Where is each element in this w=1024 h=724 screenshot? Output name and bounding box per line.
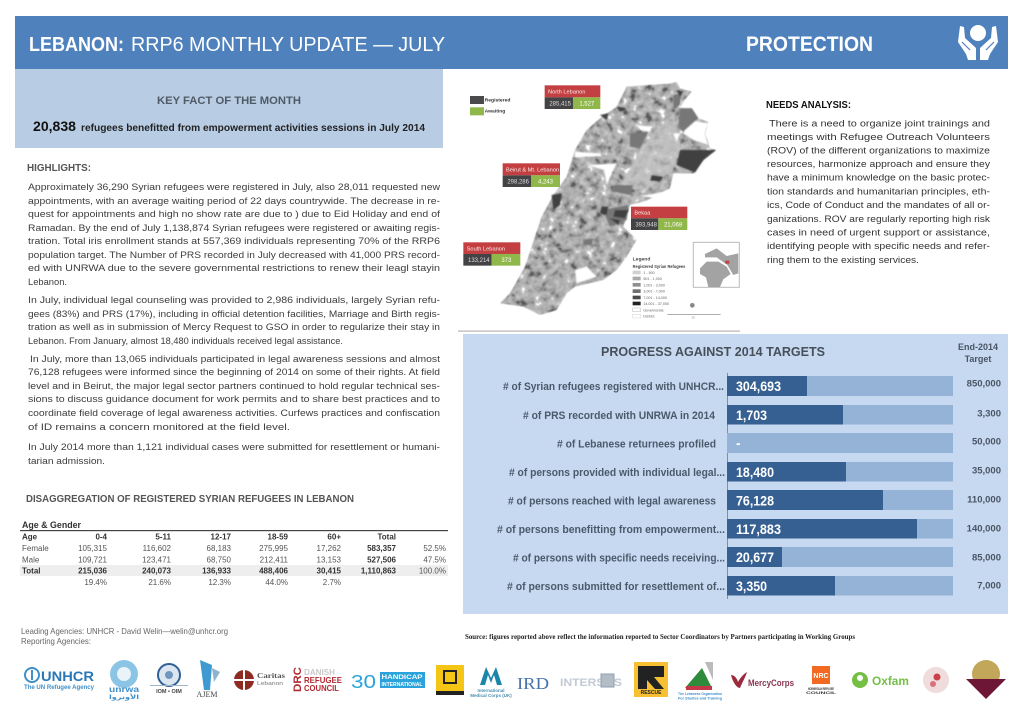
panel: key fact of the month	[15, 69, 443, 148]
bar: resettlement: 7,000	[977, 580, 1001, 592]
logo: Lebanese Organization for Studies and Training	[678, 662, 723, 700]
logo: Lebanese Organization for Studies and Training: The Lebanese Organization	[678, 691, 722, 696]
table: age and gender: 123,471	[142, 556, 172, 564]
logo: Handicap International: INTERNATIONAL	[382, 682, 422, 688]
bar: PRS recorded: 1,703	[736, 408, 767, 423]
text block: highlights: Lebanon.	[28, 277, 67, 288]
partner logos	[24, 660, 1006, 701]
text block: highlights: Approximately 36,290 Syrian refugees were registered in July, also 28,011 requested new	[28, 182, 440, 193]
map legend: 7,001 - 14,000	[643, 296, 667, 300]
bar: Syrian refugees registered: # of Syrian refugees registered with UNHCR...	[503, 381, 724, 393]
table: age and gender: 68,183	[207, 544, 232, 553]
text block: highlights: In July, individual legal counseling was provided to 2,986 individuals, largely Syrian refu-	[28, 295, 440, 306]
table: age and gender: Age & Gender	[22, 520, 81, 530]
bar: Syrian refugees registered	[503, 376, 1001, 396]
text block: highlights: quest for appointments and high no show rate are due to ) due to Eid Holiday and end of	[28, 209, 440, 220]
text block: highlights: gees (83%) and PRS (17%), including in official detention facilities, Marriage and Birth regis-	[28, 309, 440, 320]
text block: highlights: appointments, with an average waiting period of 22 days countrywide. The decrease in re-	[28, 196, 440, 207]
callout: South Lebanon	[463, 242, 520, 266]
logo: UNRWA: الأونروا	[109, 693, 139, 701]
key fact statement: 20,838	[33, 119, 77, 134]
map legend: 501 - 1,000	[643, 277, 662, 281]
needs analysis text: tion standards and humanitarian principles, eth-	[767, 186, 990, 198]
needs analysis heading: NEEDS ANALYSIS:	[766, 100, 851, 111]
target column heading: End-2014	[958, 342, 998, 352]
logo: red circle partner	[923, 667, 949, 693]
bar: PRS recorded	[523, 405, 1001, 424]
needs analysis text: ics, Code of Conduct and the mandates of all or-	[767, 200, 990, 211]
panel: progress against 2014 targets	[463, 334, 1008, 614]
text block: highlights: of ID remains a concern monitored at the field level.	[28, 422, 290, 433]
needs analysis text: cases in need of urgent support or assistance,	[767, 228, 990, 238]
title: LEBANON:	[29, 34, 124, 56]
disaggregation heading: DISAGGREGATION OF REGISTERED SYRIAN REFUGEES IN LEBANON	[26, 493, 354, 505]
bar: empowerment: 140,000	[967, 524, 1001, 534]
bar: resettlement	[507, 576, 1001, 596]
table: age and gender: 44.0%	[265, 578, 288, 587]
table: age and gender: Age	[22, 532, 38, 542]
map of Lebanon	[463, 82, 739, 320]
map legend: Registered Syrian Refugees	[633, 264, 686, 269]
legend swatch: registered: Registered	[485, 98, 510, 104]
needs analysis text: ring them to the existing services.	[767, 255, 919, 266]
logo: NRC: NRC	[813, 673, 829, 680]
table: age and gender: 116,602	[143, 544, 172, 553]
bar: Lebanese returnees: # of Lebanese returnees profiled	[557, 438, 716, 450]
bar: empowerment: # of persons benefitting from empowerment...	[497, 524, 725, 536]
table: age and gender: 136,933	[202, 566, 232, 576]
table: age and gender: 13,153	[317, 556, 342, 564]
logo: International Medical Corps: Medical Corps (UK)	[470, 693, 512, 698]
logo: Danish Refugee Council: COUNCIL	[304, 683, 339, 693]
table: age and gender: Total	[22, 566, 41, 576]
logo: AJEM: AJEM	[197, 690, 217, 699]
bar: Lebanese returnees: -	[736, 436, 740, 451]
bar: legal awareness: 110,000	[967, 494, 1001, 506]
table: age and gender: 2.7%	[323, 578, 341, 587]
callout: Bekaa: 393,948	[635, 222, 658, 228]
table: age and gender: 105,315	[78, 544, 108, 553]
logo: Handicap International: 30	[351, 672, 376, 692]
callout: North Lebanon: North Lebanon	[548, 89, 585, 95]
scale bar and north arrow	[667, 303, 721, 320]
logo: Handicap International: HANDICAP	[382, 674, 423, 681]
bar: resettlement: # of persons submitted for resettlement of...	[507, 581, 725, 593]
table: age and gender: 5-11	[155, 532, 172, 542]
table: age and gender: 68,750	[207, 556, 232, 564]
logo: NRC	[806, 666, 838, 695]
map legend: Legend	[633, 257, 650, 263]
text block: highlights: level and in Beirut, the major legal sector partners continued to hold regular technical ses-	[28, 381, 440, 392]
logo: Danish Refugee Council	[292, 667, 342, 693]
logo: UNRWA: unrwa	[109, 685, 140, 694]
logo: Danish Refugee Council: DANISH	[304, 667, 335, 677]
target column heading: Target	[965, 354, 991, 364]
table: age and gender: 1,110,863	[361, 566, 397, 576]
table: age and gender: 21.6%	[148, 578, 171, 587]
bar: individual legal counseling: # of persons provided with individual legal...	[509, 467, 725, 479]
logo: yellow partner	[436, 665, 464, 695]
bar: legal awareness: 76,128	[736, 494, 774, 508]
map legend	[633, 257, 686, 319]
logo: IRC Rescue: RESCUE	[641, 690, 662, 696]
bar: PRS recorded: 3,300	[977, 408, 1001, 420]
logo: Oxfam: Oxfam	[872, 674, 909, 688]
callout: Beirut and Mt. Lebanon: Beirut & Mt. Lebanon	[506, 167, 559, 173]
logo: Mercy Corps	[731, 672, 794, 689]
table: age and gender: 240,073	[142, 566, 172, 576]
text block: highlights: tarian admission.	[28, 456, 105, 467]
table: age and gender: 52.5%	[423, 544, 446, 553]
table: age and gender: 18-59	[268, 532, 289, 542]
callout: North Lebanon: 285,415	[549, 101, 572, 107]
logo: IOM: IOM • OIM	[156, 689, 182, 695]
callout: Beirut and Mt. Lebanon: 4,243	[538, 179, 554, 185]
table: age and gender: 109,721	[78, 556, 108, 564]
needs analysis text: ganizations. ROV are regularly reporting high risk	[767, 214, 990, 225]
logo: International Medical Corps: International	[477, 688, 505, 693]
text block: highlights	[28, 182, 440, 467]
table: age and gender: 215,036	[78, 566, 108, 576]
inset locator map	[693, 242, 739, 287]
sector heading: PROTECTION	[746, 33, 873, 56]
bar: individual legal counseling: 35,000	[972, 466, 1001, 476]
table: age and gender: 212,411	[260, 556, 289, 564]
bar: empowerment	[497, 519, 1001, 538]
panel: needs analysis	[766, 100, 990, 266]
logo: UNRWA	[109, 660, 140, 701]
logo: Caritas: Caritas	[257, 672, 285, 680]
text block: highlights: sions to discuss guidance document for work permits and to share best practices and to	[28, 394, 440, 405]
map legend: 14,001 - 37,000	[643, 302, 669, 306]
table: age and gender: 30,415	[317, 566, 342, 576]
table: age and gender: 488,406	[259, 566, 289, 576]
logo: gold and maroon crest	[966, 660, 1006, 699]
text block: highlights: In July, more than 13,065 individuals participated in legal awareness sessions and almost	[30, 354, 440, 365]
callout: Bekaa: 21,068	[664, 222, 683, 228]
legend swatch: registered	[470, 96, 510, 104]
divider under map	[458, 330, 740, 332]
title: RRP6 MONTHLY UPDATE — JULY	[131, 34, 445, 56]
chart axis	[727, 373, 728, 599]
map legend: District	[643, 315, 654, 319]
logo: Caritas	[233, 669, 285, 691]
bar: individual legal counseling: 18,480	[736, 465, 774, 480]
text block: highlights: 76,128 refugees were informed since the beginning of 2014 on some of their rights. At field	[28, 367, 440, 378]
callout: South Lebanon: 133,214	[468, 258, 490, 264]
logo: International Medical Corps	[470, 667, 512, 698]
table: age and gender: 60+	[327, 532, 341, 542]
table: age and gender: Female	[22, 544, 49, 553]
logo: Mercy Corps: MercyCorps	[748, 678, 794, 689]
needs analysis text: meetings with Refugee Outreach Volunteers	[767, 132, 990, 143]
logo: Caritas: Lebanon	[257, 681, 283, 687]
table: age and gender: Total	[377, 532, 396, 542]
source note: Source: figures reported above reflect the information reported to Sector Coordinators by Partners participating in Working Groups	[465, 632, 855, 641]
logo: UNHCR: UNHCR	[41, 668, 94, 684]
callout: Bekaa: Bekaa	[634, 210, 651, 216]
logo: Danish Refugee Council: DRC	[292, 667, 304, 692]
text block: highlights: population target. The Number of PRS recorded in July decreased with 41,000 PRS record-	[28, 250, 440, 261]
table: age and gender	[20, 520, 448, 587]
logo: Lebanese Organization for Studies and Training: For Studies and Training	[678, 696, 723, 700]
header banner	[15, 16, 1008, 69]
callout: South Lebanon: 373	[501, 258, 512, 264]
legend swatch: awaiting	[470, 107, 505, 115]
bar: specific needs	[513, 547, 1001, 567]
darker and white district patches	[552, 90, 716, 283]
callout: Beirut and Mt. Lebanon	[503, 163, 560, 187]
callout: South Lebanon: South Lebanon	[467, 246, 505, 252]
bar: Lebanese returnees	[557, 433, 1001, 453]
target column heading	[958, 342, 998, 364]
legend swatch: awaiting: Awaiting	[485, 109, 505, 115]
table: age and gender: Male	[22, 556, 40, 564]
needs analysis text: resources, harmonize approach and ensure they	[767, 159, 990, 170]
bar: empowerment: 117,883	[736, 522, 781, 537]
bar: Syrian refugees registered: 850,000	[967, 378, 1001, 390]
logo: UNHCR: The UN Refugee Agency	[24, 685, 95, 691]
table: age and gender: 583,357	[367, 544, 397, 553]
leading agencies text: Reporting Agencies:	[21, 636, 91, 646]
text block: highlights: coordinate field coverage of legal awareness activities. Curfews practices and confiscation	[28, 408, 440, 419]
map legend: Governorate	[643, 308, 664, 312]
needs analysis text	[767, 118, 990, 266]
table: age and gender: 12.3%	[208, 578, 231, 587]
text block: highlights: Lebanon. From January, almost 18,480 individuals received legal assistance.	[28, 336, 343, 347]
bar: legal awareness	[508, 490, 1001, 510]
text block: highlights: ed with UNRWA due to the severe governmental restrictions to renew their leagl stayin	[28, 263, 440, 274]
key fact heading: KEY FACT OF THE MONTH	[157, 95, 301, 107]
logo: Danish Refugee Council: REFUGEE	[304, 675, 342, 685]
map legend: 1 - 500	[643, 271, 655, 275]
leading agencies text: Leading Agencies: UNHCR - David Welin—welin@unhcr.org	[21, 626, 228, 636]
logo: IRC Rescue	[634, 662, 668, 697]
logo: INTERSOS: INTERSOS	[560, 677, 622, 689]
table: age and gender: 47.5%	[423, 556, 446, 564]
needs analysis text: identifying people with specific needs and refer-	[767, 241, 990, 252]
text block: highlights: In July 2014 more than 1,121 individual cases were submitted for resettlement or humani-	[28, 442, 440, 453]
bar: specific needs: 85,000	[972, 552, 1001, 564]
chart heading: PROGRESS AGAINST 2014 TARGETS	[601, 344, 825, 359]
logo: UNHCR	[24, 668, 95, 691]
bar: PRS recorded: # of PRS recorded with UNRWA in 2014	[523, 410, 716, 422]
callout: Bekaa	[631, 207, 687, 230]
map legend: 1,001 - 3,000	[643, 283, 665, 287]
needs analysis text: (ROV) of the different organizations to maximize	[767, 146, 990, 156]
needs analysis text: have a minimum knowledge on the basic protec-	[767, 172, 990, 184]
highlights heading: HIGHLIGHTS:	[27, 163, 91, 174]
table: age and gender: 0-4	[95, 532, 108, 542]
bar: resettlement: 3,350	[736, 579, 767, 594]
needs analysis text: There is a need to organize joint trainings and	[769, 118, 990, 130]
logo: NRC: COUNCIL	[806, 691, 838, 695]
icon: protecting hands	[958, 25, 998, 60]
logo: IRD: IRD	[517, 674, 549, 693]
logo: Handicap International	[351, 672, 425, 692]
table: age and gender: 17,262	[317, 544, 342, 553]
logo: IOM	[150, 664, 188, 695]
logo: Oxfam	[852, 672, 909, 688]
scale bar and north arrow: 25	[692, 316, 695, 320]
table: age and gender: 527,506	[367, 556, 397, 564]
callout: Beirut and Mt. Lebanon: 298,286	[507, 179, 530, 185]
text block: highlights: tration as well as in submission of Mercy Request to GSO in order to regularize their stay in	[28, 322, 440, 333]
callout: North Lebanon: 1,527	[579, 101, 595, 107]
logo: NRC: NORWEGIAN REFUGEE	[808, 687, 834, 691]
map legend: 3,001 - 7,000	[643, 290, 665, 294]
bar: specific needs: 20,677	[736, 550, 774, 565]
text block: highlights: tration. Total iris enrollment stands at 557,369 individuals representing 70% of the RRP6	[28, 236, 440, 247]
callout: North Lebanon	[545, 85, 600, 109]
bar: specific needs: # of persons with specific needs receiving...	[513, 552, 725, 564]
bar: Syrian refugees registered: 304,693	[736, 379, 781, 394]
logo: AJEM	[197, 660, 220, 699]
map base with mottled districts	[500, 82, 716, 315]
text block: highlights: Ramadan. By the end of July 1,138,874 Syrian refugees were registered or awaiting regis-	[28, 223, 440, 234]
key fact statement: refugees benefitted from empowerment activities sessions in July 2014	[81, 122, 425, 134]
bar: Lebanese returnees: 50,000	[972, 436, 1001, 448]
bar: legal awareness: # of persons reached with legal awareness	[508, 496, 716, 508]
table: age and gender: 19.4%	[84, 578, 107, 587]
table: age and gender: 100.0%	[419, 566, 446, 576]
bar: individual legal counseling	[509, 462, 1001, 482]
table: age and gender: 275,995	[259, 544, 289, 553]
table: age and gender: 12-17	[211, 532, 232, 542]
leading agencies text	[21, 626, 228, 646]
